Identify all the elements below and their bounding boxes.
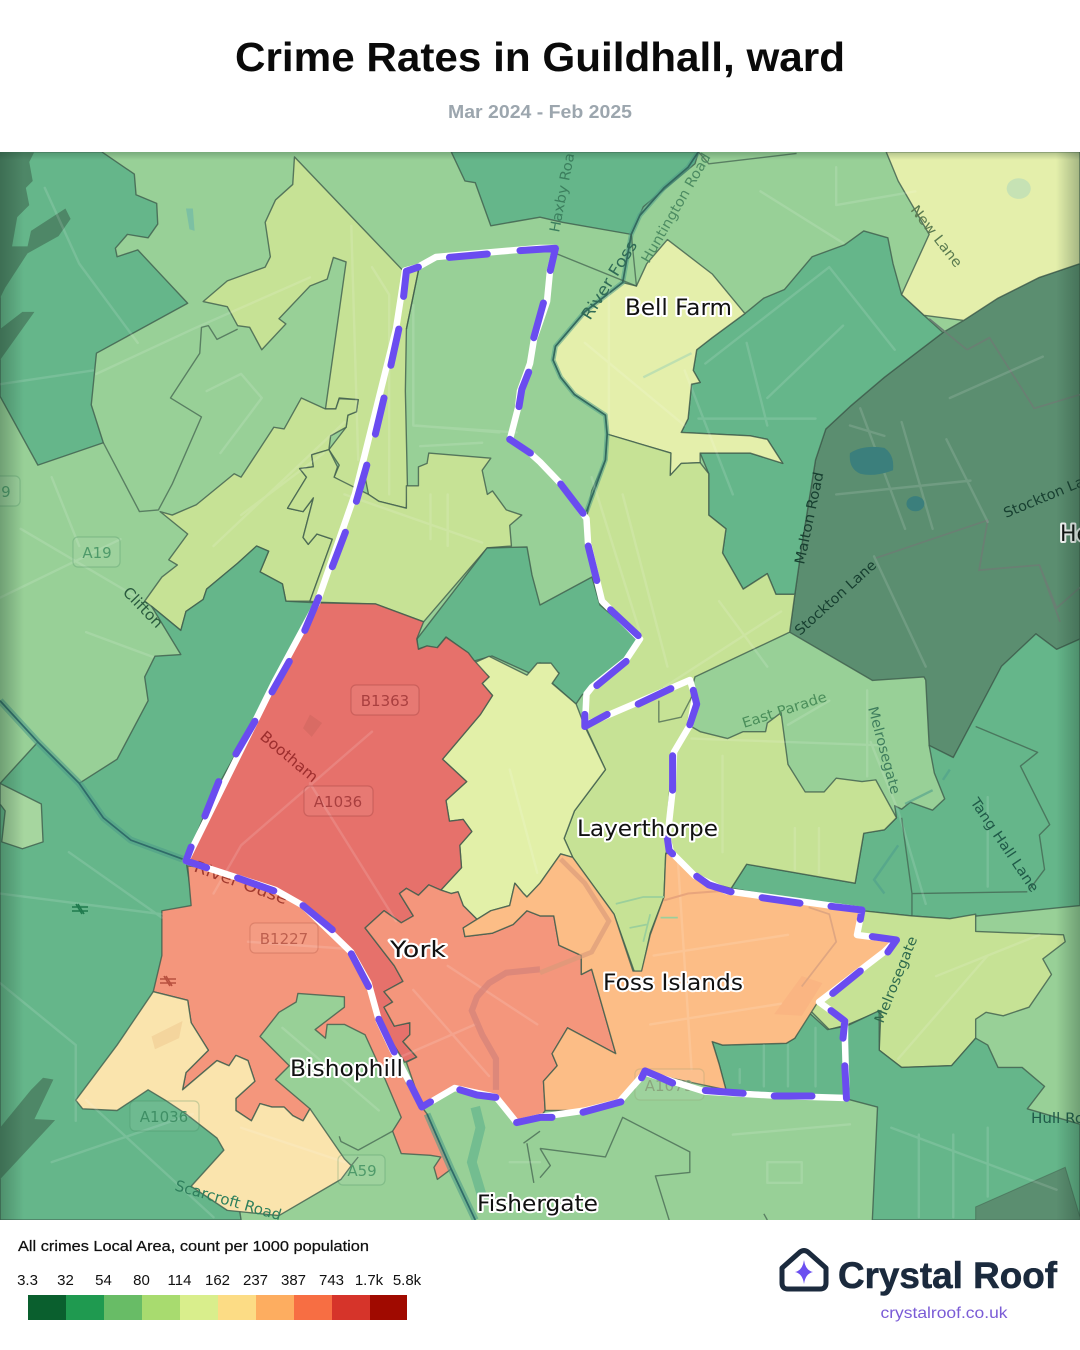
badge: B1363: B1363 (361, 692, 409, 710)
title: Crime Rates in Guildhall, ward (235, 34, 845, 80)
map edge vignette (0, 152, 1080, 1220)
legend tick labels (17, 1272, 422, 1289)
label: Melrosegate north: Melrosegate (864, 705, 903, 796)
place names (290, 296, 1080, 1217)
badge: A59 (338, 1155, 385, 1185)
label: Huntington Road: Huntington Road (639, 151, 714, 266)
white boundary line (186, 248, 896, 1122)
legend tick labels: 54 (95, 1272, 112, 1289)
legend tick labels: 80 (133, 1272, 150, 1289)
regions: south-east quadrant (463, 634, 1080, 1220)
regions: north-west quadrant (0, 152, 698, 667)
badge: B1227: B1227 (260, 930, 308, 948)
label: River Ouse: River Ouse (192, 857, 290, 908)
badge: A1079: A1079 (645, 1077, 693, 1095)
label: East Parade: East Parade (740, 689, 829, 732)
badge: A19: A19 (82, 544, 112, 562)
badge: A1036 Bootham (304, 786, 373, 816)
badge: A1036 south (130, 1101, 199, 1131)
badge: B1363 (351, 685, 419, 715)
regions: north-east quadrant (553, 152, 1080, 973)
railway station icons (72, 904, 176, 986)
badge: B1227 (250, 923, 318, 953)
legend tick labels: 162 (205, 1272, 230, 1289)
legend tick labels: 114 (168, 1272, 191, 1289)
place: Layerthorpe: Layerthorpe (577, 817, 718, 842)
legend tick labels: 32 (57, 1272, 74, 1289)
legend tick labels: 5.8k (393, 1272, 422, 1289)
badge: A1036 south: A1036 (140, 1108, 188, 1126)
place: Bell Farm: Bell Farm (625, 296, 732, 321)
legend tick labels: 237 (243, 1272, 268, 1289)
legend (17, 1238, 422, 1320)
place: Fishergate: Fishergate (477, 1192, 598, 1217)
label: Haxby Road: Haxby Road (547, 142, 580, 234)
legend colour scale (28, 1295, 407, 1320)
place: Bishophill: Bishophill (290, 1057, 403, 1082)
badge: A1079 (635, 1069, 704, 1100)
badge: A19 (73, 537, 120, 567)
badge: A59: A59 (347, 1162, 377, 1180)
label: Scarcroft Road: Scarcroft Road (173, 1177, 284, 1224)
map base: light green areas (0, 152, 1080, 1220)
badge: A19 cut off at left edge (0, 476, 20, 506)
legend tick labels: 1.7k (355, 1272, 384, 1289)
icon: house with star (782, 1250, 826, 1289)
ward boundary: Guildhall (186, 248, 896, 1123)
label: Clifton: Clifton (119, 583, 167, 632)
label: Stockton Lane: Stockton Lane (792, 557, 880, 639)
subtitle: date range: Mar 2024 - Feb 2025 (448, 102, 632, 122)
road and river names (119, 142, 1080, 1224)
regions: south-west quadrant (0, 546, 616, 1220)
website url: crystalroof.co.uk (880, 1305, 1009, 1322)
legend tick labels: 743 (319, 1272, 344, 1289)
place: York: York (389, 938, 446, 963)
logo wordmark: Crystal Roof (838, 1255, 1058, 1296)
badge: A1036 Bootham: A1036 (314, 793, 362, 811)
legend tick labels: 3.3 (17, 1272, 38, 1289)
road number badges (0, 476, 704, 1185)
purple dashes (186, 248, 896, 1123)
region: central medium green area inside the ward (417, 547, 640, 704)
label: Tang Hall Lane: Tang Hall Lane (966, 794, 1041, 895)
label: Bootham: Bootham (256, 727, 322, 786)
label: New Lane: New Lane (907, 203, 965, 271)
label: Melrosegate south: Melrosegate (872, 934, 921, 1025)
place: Foss Islands: Foss Islands (603, 971, 743, 996)
logo: Crystal Roof (782, 1250, 1058, 1322)
legend tick labels: 387 (281, 1272, 306, 1289)
label: River Foss: River Foss (577, 237, 641, 323)
legend title: All crimes Local Area, count per 1000 population (18, 1238, 369, 1255)
label: Malton Road: Malton Road (792, 471, 827, 566)
